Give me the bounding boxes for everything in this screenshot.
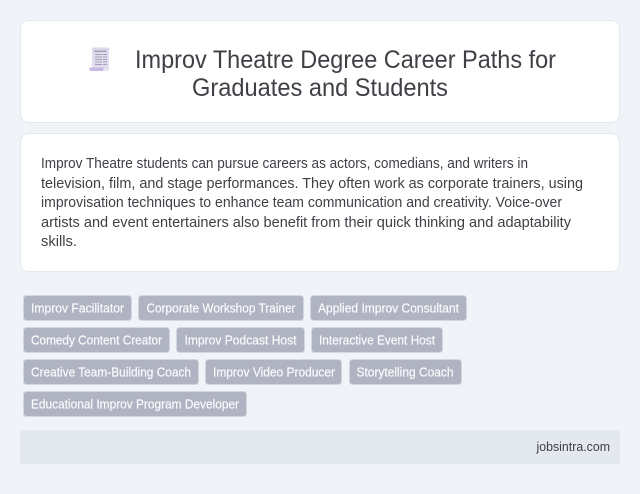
tag <box>310 296 466 320</box>
footer bar <box>20 430 620 464</box>
tag <box>24 296 132 320</box>
panel: description: artists and event entertainers also benefit from their quick thinking and adaptability <box>41 215 572 231</box>
tag: Educational Improv Program Developer <box>31 396 240 412</box>
tag: Creative Team-Building Coach <box>31 364 191 380</box>
tag <box>176 328 304 352</box>
header panel <box>20 20 620 122</box>
tag <box>24 392 246 416</box>
tag: Improv Podcast Host <box>184 332 297 348</box>
title: Improv Theatre Degree Career Paths for <box>135 46 556 74</box>
tag: Improv Facilitator <box>31 300 125 316</box>
panel: description: improvisation techniques to enhance team communication and creativity. Voice-over <box>41 195 562 211</box>
panel: description: skills. <box>41 234 77 250</box>
panel: description <box>20 134 620 272</box>
tag <box>24 360 198 384</box>
tag: Improv Video Producer <box>213 364 336 380</box>
tag: Comedy Content Creator <box>31 332 163 348</box>
career tags <box>24 296 466 416</box>
title: Graduates and Students <box>192 74 448 102</box>
tag <box>312 328 442 352</box>
tag: Corporate Workshop Trainer <box>146 300 296 316</box>
tag <box>138 296 304 320</box>
title <box>135 46 556 102</box>
tag: Applied Improv Consultant <box>318 300 459 316</box>
tag <box>24 328 170 352</box>
tag <box>350 360 462 384</box>
panel: description: Improv Theatre students can pursue careers as actors, comedians, and writers in <box>41 156 528 172</box>
icon: document scroll <box>89 47 110 72</box>
tag: Interactive Event Host <box>319 332 435 348</box>
panel: description: television, film, and stage performances. They often work as corporate trainers, using <box>41 176 583 192</box>
tag <box>206 360 342 384</box>
footer source text: jobsintra.com <box>536 440 610 454</box>
tag: Storytelling Coach <box>356 364 454 380</box>
